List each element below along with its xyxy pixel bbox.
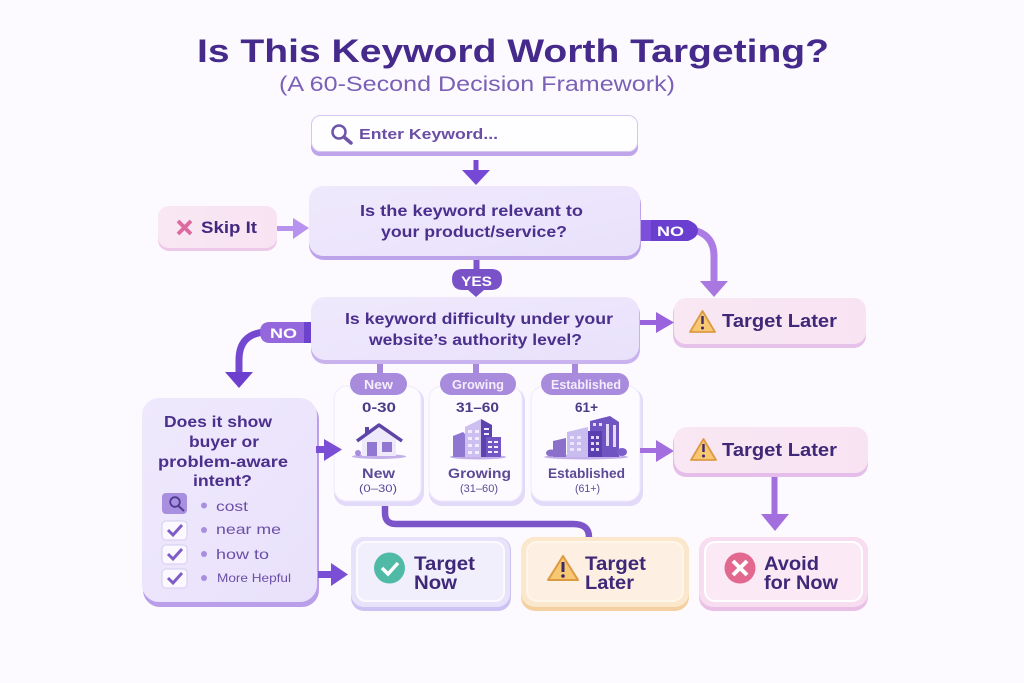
card: new: [334, 364, 424, 506]
icon: search: [332, 126, 351, 143]
outcome: avoid for now: [699, 537, 868, 611]
title: Is This Keyword Worth Targeting?: [197, 33, 829, 69]
item: how to: how to: [216, 546, 269, 562]
outcome: avoid for now: Avoid: [764, 554, 819, 575]
card: new: New: [362, 465, 395, 481]
card: growing: (31–60): [460, 483, 498, 495]
icon: warning: [691, 439, 716, 460]
pill: growing: [440, 373, 516, 395]
icon: warning: [690, 311, 715, 332]
item: cost: [162, 493, 248, 514]
arrow: skip it: [277, 218, 309, 239]
outcome: skip it: Skip It: [201, 218, 257, 237]
outcome: target later middle: [673, 427, 868, 477]
icon: check circle: [374, 552, 405, 584]
card: new: New: [364, 378, 393, 392]
pill: new: [350, 373, 407, 395]
outcome: target now: [351, 537, 511, 611]
subtitle: (A 60-Second Decision Framework): [279, 73, 675, 96]
input: enter keyword: Enter Keyword...: [359, 126, 498, 143]
card: growing: [429, 364, 525, 506]
outcome: target now: Now: [414, 573, 457, 594]
icon: office campus: [544, 416, 628, 460]
arrow: difficulty to target later: [640, 312, 674, 333]
arrow: input to relevance: [462, 160, 490, 185]
card: growing: Growing: [448, 465, 511, 481]
card: established: Established: [551, 378, 621, 392]
item: more helpful: More Hepful: [217, 571, 291, 585]
pill: established: [541, 373, 629, 395]
outcome: target later top: Target Later: [722, 311, 837, 331]
item: near me: [162, 521, 281, 540]
outcome: skip it: [158, 206, 277, 251]
outcome: target later bottom: Target: [585, 554, 647, 575]
item: how to: [162, 545, 269, 564]
icon: x circle: [724, 552, 756, 584]
panel: intent question: buyer or: [189, 434, 259, 451]
outcome: avoid for now: for Now: [764, 573, 838, 594]
card: established: Established: [548, 465, 625, 481]
outcome: target later bottom: [521, 537, 689, 611]
arrow: intent to new card: [316, 439, 342, 461]
connector: new card to target later: [385, 503, 589, 537]
card: established: (61+): [575, 483, 600, 495]
panel: difficulty question: [311, 297, 640, 364]
yes label: YES: [461, 273, 492, 289]
arrow: intent to target now: [318, 563, 348, 586]
panel: difficulty question: Is keyword difficulty under your: [345, 311, 613, 328]
panel: intent question: intent?: [193, 473, 252, 490]
panel: relevance question: [309, 186, 641, 260]
no label and arrow: difficulty to intent: NO: [270, 325, 297, 341]
no label and arrow: relevance to target later: [641, 220, 728, 297]
card: established: 61+: [575, 399, 598, 415]
panel: relevance question: your product/service?: [381, 224, 567, 241]
panel: intent question: [142, 398, 319, 607]
outcome: target later top: [673, 298, 866, 348]
yes label: [452, 260, 502, 297]
card: new: 0-30: [362, 399, 396, 415]
card: established: [531, 364, 643, 506]
icon: house: [352, 425, 406, 459]
panel: difficulty question: website’s authority level?: [368, 332, 582, 349]
panel: intent question: problem-aware: [158, 454, 288, 471]
card: new: (0–30): [359, 483, 397, 495]
no label and arrow: relevance to target later: NO: [657, 223, 684, 239]
arrow: established to target later: [640, 440, 674, 462]
item: near me: near me: [216, 521, 281, 537]
icon: buildings: [450, 419, 506, 460]
panel: intent question: Does it show: [164, 414, 273, 431]
item: cost: cost: [216, 498, 248, 514]
no label and arrow: difficulty to intent: [225, 322, 311, 388]
card: growing: Growing: [452, 378, 504, 392]
item: more helpful: [162, 569, 291, 588]
outcome: target later middle: Target Later: [722, 440, 837, 460]
input: enter keyword: [311, 116, 638, 156]
icon: warning: [548, 556, 578, 580]
card: growing: 31–60: [456, 399, 499, 415]
arrow: target later to avoid: [761, 477, 789, 531]
outcome: target now: Target: [414, 554, 476, 575]
icon: x: [178, 221, 191, 234]
outcome: target later bottom: Later: [585, 573, 635, 594]
panel: relevance question: Is the keyword relevant to: [360, 203, 583, 220]
